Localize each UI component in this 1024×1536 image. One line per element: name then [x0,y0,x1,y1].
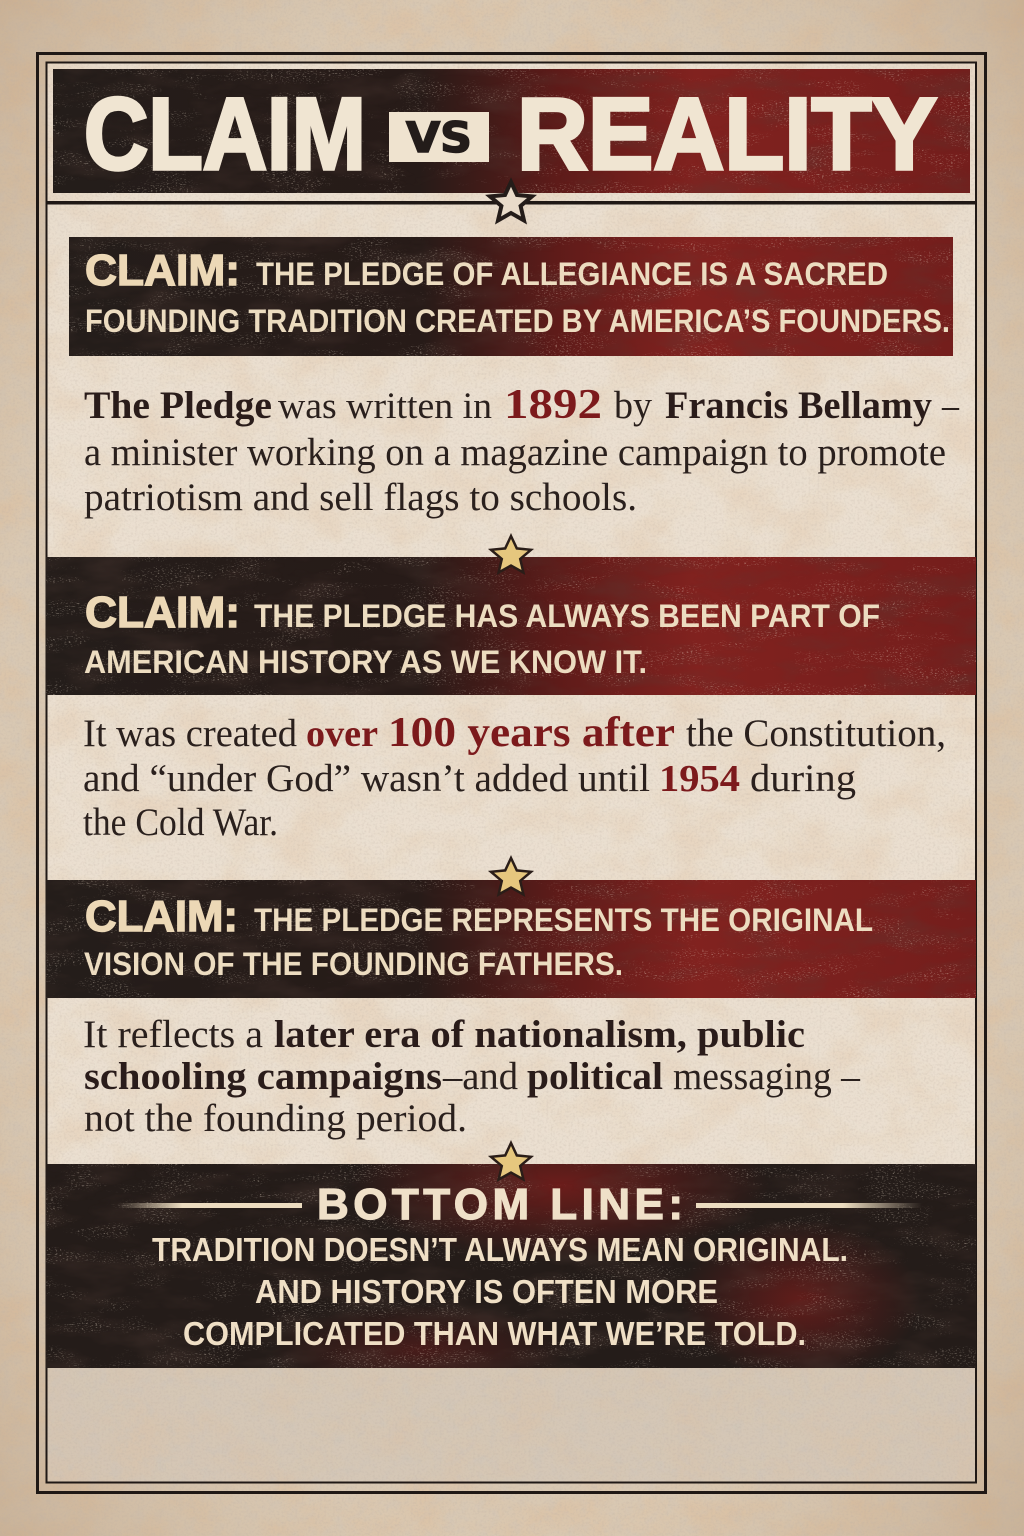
icon: star divider 3 [491,1143,531,1180]
header banner [53,69,970,193]
header rule [46,201,976,204]
reality 2 text: and “under God” wasn’t added until [83,757,650,800]
title [84,77,937,191]
reality 1 text: a minister working on a magazine campaign to promote [84,431,946,474]
reality 1 text: 1892 [504,382,602,428]
reality 2 text: the Cold War. [83,801,278,844]
claim 3 heading: VISION OF THE FOUNDING FATHERS. [84,946,623,982]
reality 1 text: The Pledge [84,384,272,427]
claim 1 heading: FOUNDING TRADITION CREATED BY AMERICA’S FOUNDERS. [85,303,950,339]
VS badge [389,112,489,162]
reality 1 text: Francis Bellamy [665,384,932,427]
bottom line text [152,1231,848,1352]
reality 1 text: by [614,384,652,427]
bottom line text: COMPLICATED THAN WHAT WE’RE TOLD. [183,1315,806,1352]
reality 3 text: messaging – [673,1055,860,1098]
icon: star divider 2 [491,858,531,894]
reality 2 text: 1954 [659,758,740,800]
reality 2 text: 100 years after [388,710,675,756]
reality 3 text: –and [442,1055,518,1098]
panel: claim 1 band [69,237,953,356]
band distress texture [46,69,976,1368]
claim 3 heading: THE PLEDGE REPRESENTS THE ORIGINAL [254,902,873,938]
bottom line heading: BOTTOM LINE: [317,1180,683,1229]
reality 3 text: later era of nationalism, public [274,1013,805,1056]
claim 2 heading: AMERICAN HISTORY AS WE KNOW IT. [84,644,647,680]
bottom line text: AND HISTORY IS OFTEN MORE [255,1273,718,1310]
reality 1 text: patriotism and sell flags to schools. [84,476,637,519]
claim 2 heading [84,588,880,680]
claim 1 heading [85,246,950,339]
reality 2 text: the Constitution, [686,712,946,755]
icon: star divider 1 [491,536,531,572]
claim 2 heading: CLAIM: [85,588,240,637]
panel: bottom line band [48,1164,975,1368]
reality 2 text: It was created [83,712,297,755]
claim 3 heading: CLAIM: [85,892,238,941]
band dark blotches [46,69,976,1368]
icon: header star [490,182,532,220]
reality 3 text: not the founding period. [84,1097,467,1140]
claim 3 heading [84,892,873,982]
bottom line heading [118,1180,922,1229]
reality 2 text [83,710,946,844]
panel: claim 2 band [46,557,976,695]
reality 1 text: was written in [278,386,492,427]
reality 2 text: over [306,713,378,755]
reality 1 text [84,382,959,519]
panel: claim 3 band [46,880,976,998]
reality 2 text: during [750,757,856,800]
reality 1 text: – [941,384,959,427]
reality 3 text: schooling campaigns [84,1055,442,1098]
VS badge: VS [406,113,472,162]
reality 3 text: It reflects a [83,1013,263,1056]
claim 1 heading: CLAIM: [85,246,240,295]
claim 1 heading: THE PLEDGE OF ALLEGIANCE IS A SACRED [256,256,888,292]
title: CLAIM: CLAIM [84,77,366,191]
claim 2 heading: THE PLEDGE HAS ALWAYS BEEN PART OF [254,598,880,634]
bottom line text: TRADITION DOESN’T ALWAYS MEAN ORIGINAL. [152,1231,848,1268]
reality 3 text: political [527,1055,663,1098]
reality 3 text [83,1013,860,1140]
title: REALITY: REALITY [517,77,937,191]
